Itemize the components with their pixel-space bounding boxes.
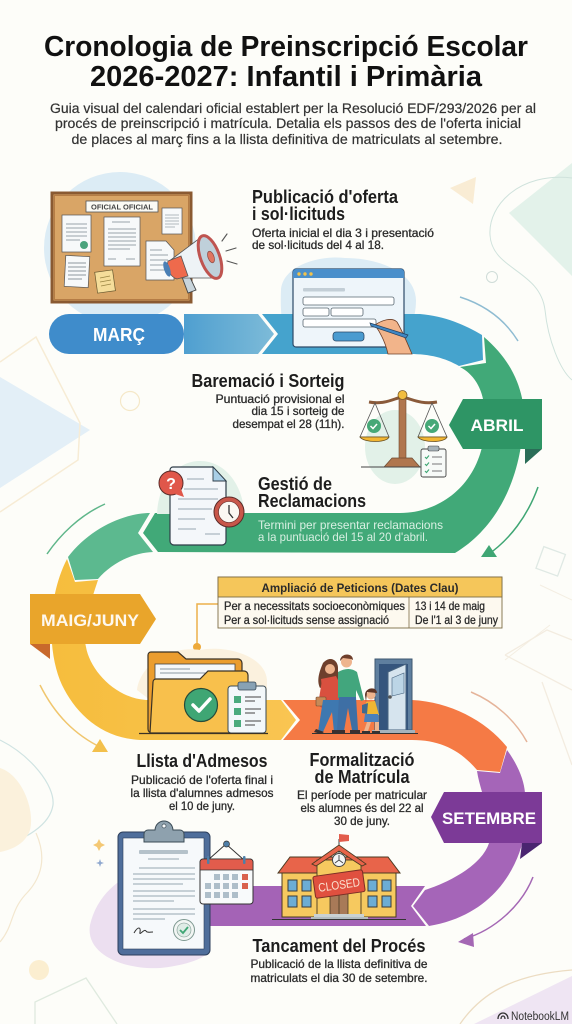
icon: calendar <box>200 841 253 904</box>
icon: online form with hand <box>293 269 412 354</box>
text: baremació i sorteig: desempat el 28 (11h). <box>232 417 344 431</box>
month label: SETEMBRE <box>431 792 542 859</box>
text: gestió de reclamacions: Reclamacions <box>258 491 366 511</box>
text: publicació d'oferta <box>252 187 434 252</box>
title: Cronologia de Preinscripció Escolar <box>44 31 528 63</box>
table: ampliació de peticions: Per a sol·licituds sense assignació <box>224 613 389 627</box>
month label: MARÇ: MARÇ <box>93 325 145 345</box>
icon: claim document with clock: ? <box>166 476 176 493</box>
month label: ABRIL <box>449 399 542 464</box>
icon: folder with check <box>137 649 268 734</box>
text: tancament del procés: Tancament del Procés <box>252 936 426 956</box>
intro text: Guia visual del calendari oficial establert per la Resolució EDF/293/2026 per al <box>50 101 536 116</box>
text: gestió de reclamacions <box>258 474 443 544</box>
text: formalització de matrícula <box>297 750 427 828</box>
text: baremació i sorteig: Puntuació provisional el <box>216 392 344 406</box>
icon: family at door <box>312 654 418 734</box>
text: publicació d'oferta: Publicació d'oferta <box>252 187 399 207</box>
icon: notice board: OFICIAL OFICIAL <box>91 204 154 212</box>
text: formalització de matrícula: Formalització <box>310 750 414 770</box>
timeline band: april green lower left <box>68 513 153 580</box>
text: publicació d'oferta: Oferta inicial el dia 3 i presentació <box>252 226 434 240</box>
title: 2026-2027: Infantil i Primària <box>90 61 483 93</box>
timeline band: june orange <box>283 700 507 772</box>
intro text <box>50 101 536 147</box>
title <box>44 31 528 93</box>
text: gestió de reclamacions: Gestió de <box>258 474 332 494</box>
timeline band: may june yellow <box>51 559 296 740</box>
icon: balance scale <box>360 390 447 484</box>
intro text: de places al març fins a la llista definitiva de matriculats al setembre. <box>72 132 502 147</box>
timeline band: april green <box>143 337 523 553</box>
text: tancament del procés: Publicació de la llista definitiva de <box>250 957 428 971</box>
text: gestió de reclamacions: a la puntuació del 15 al 20 d'abril. <box>258 530 428 544</box>
text: llista d'admesos: el 10 de juny. <box>169 799 235 813</box>
table: ampliació de peticions: 13 i 14 de maig <box>415 599 485 613</box>
icon: closed school: CLOSED <box>317 875 361 895</box>
text: llista d'admesos: Llista d'Admesos <box>136 751 268 771</box>
month label: ABRIL: ABRIL <box>470 416 524 435</box>
month label: MARÇ <box>49 314 184 354</box>
text: formalització de matrícula: de Matrícula <box>314 767 410 787</box>
text: publicació d'oferta: i sol·licituds <box>252 204 345 224</box>
text: publicació d'oferta: de sol·licituds del 4 al 18. <box>252 238 384 252</box>
intro text: procés de preinscripció i matrícula. Detalia els passos des de l'oferta inicial <box>55 116 521 131</box>
icon: notice board <box>52 193 191 302</box>
text: formalització de matrícula: El període per matricular <box>297 788 427 802</box>
month label: MAIG/JUNY <box>30 594 156 659</box>
icon: closed school <box>272 834 406 920</box>
text: baremació i sorteig: Baremació i Sorteig <box>192 371 344 391</box>
text: llista d'admesos: la llista d'alumnes admesos <box>130 786 274 800</box>
month label: SETEMBRE: SETEMBRE <box>442 809 536 828</box>
text: baremació i sorteig <box>192 371 345 431</box>
icon: megaphone <box>162 233 237 293</box>
month label: MAIG/JUNY: MAIG/JUNY <box>41 611 140 630</box>
table: ampliació de peticions <box>193 577 502 651</box>
table: ampliació de peticions: De l'1 al 3 de juny <box>415 613 498 627</box>
text: tancament del procés: matriculats el dia 30 de setembre. <box>250 971 428 985</box>
table: ampliació de peticions: Per a necessitats socioeconòmiques <box>224 599 405 613</box>
table: ampliació de peticions: Ampliació de Peticions (Dates Clau) <box>262 581 458 595</box>
text: formalització de matrícula: els alumnes és del 22 al <box>300 801 424 815</box>
text: llista d'admesos: Publicació de l'oferta final i <box>131 773 273 787</box>
timeline band: march blue <box>184 314 483 366</box>
text: gestió de reclamacions: Termini per presentar reclamacions <box>258 518 443 532</box>
timeline band: september purple <box>210 750 525 926</box>
text: baremació i sorteig: dia 15 i sorteig de <box>252 404 345 418</box>
icon: purple blob and sparkles <box>90 839 210 968</box>
text: tancament del procés <box>250 936 428 985</box>
icon: claim document with clock <box>157 461 244 545</box>
text: llista d'admesos <box>130 751 274 813</box>
icon: signed clipboard <box>118 821 210 955</box>
text: formalització de matrícula: 30 de juny. <box>334 814 390 828</box>
